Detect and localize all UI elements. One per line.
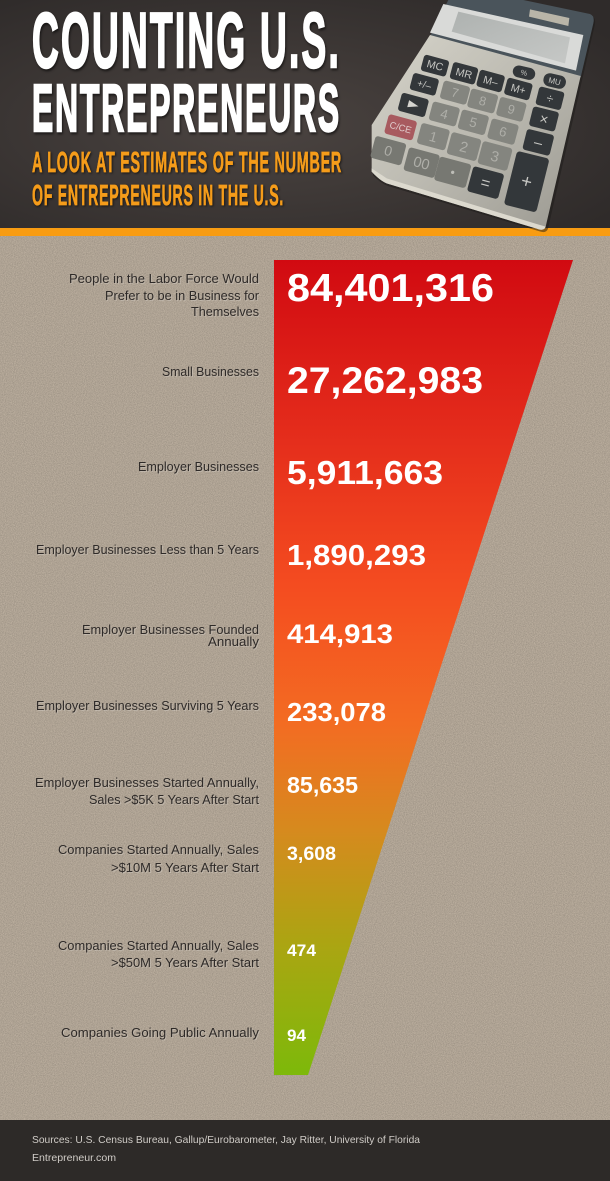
row: 474: Companies Started Annually, Sales: [58, 939, 259, 953]
calculator keys: M+: [509, 82, 527, 97]
row: 85,635: 85,635: [287, 772, 358, 798]
title: [32, 0, 341, 146]
row: 414,913: [82, 619, 393, 649]
footer credit: Entrepreneur.com: [32, 1152, 116, 1164]
calculator keys: 5: [468, 114, 479, 131]
calculator keys: ÷: [545, 91, 555, 106]
row: 85,635: Sales >$5K 5 Years After Start: [89, 793, 259, 807]
row: 474: 474: [287, 941, 317, 960]
calculator keys: MC: [425, 58, 445, 74]
row: 27,262,983: [162, 360, 483, 401]
calculator keys: ×: [538, 111, 550, 129]
row: 233,078: Employer Businesses Surviving 5 Years: [36, 699, 259, 713]
header panel: [0, 0, 610, 228]
calculator keys: MR: [454, 66, 474, 82]
header background: [0, 0, 610, 228]
icon: calculator: [370, 0, 595, 232]
row: 94: [61, 1026, 307, 1045]
row: 1,890,293: 1,890,293: [287, 540, 426, 572]
calculator keys: [370, 54, 567, 213]
row: 5,911,663: 5,911,663: [287, 454, 443, 491]
row: 233,078: [36, 697, 386, 727]
calculator keys: MU: [547, 76, 562, 87]
row: 84,401,316: [69, 267, 494, 319]
row: 3,608: [58, 843, 336, 875]
calculator keys: M–: [482, 74, 499, 89]
orange divider bar: [0, 228, 610, 236]
row: 414,913: Annually: [208, 635, 260, 649]
row: 94: Companies Going Public Annually: [61, 1026, 260, 1040]
row: 474: >$50M 5 Years After Start: [111, 956, 260, 970]
subtitle: [32, 147, 342, 212]
row: 84,401,316: 84,401,316: [287, 267, 494, 310]
row: 27,262,983: 27,262,983: [287, 360, 483, 401]
row: 84,401,316: People in the Labor Force Would: [69, 272, 259, 286]
row: 84,401,316: Themselves: [191, 305, 259, 319]
calculator keys: 9: [506, 102, 516, 117]
row: 5,911,663: Employer Businesses: [138, 460, 259, 474]
calculator keys: 6: [497, 124, 508, 140]
calculator keys: =: [479, 174, 492, 193]
calculator keys: 8: [477, 94, 488, 109]
row: 27,262,983: Small Businesses: [162, 365, 259, 379]
row: 5,911,663: [138, 454, 443, 491]
row: 414,913: Employer Businesses Founded: [82, 623, 259, 637]
calculator keys: +/–: [416, 78, 433, 93]
row: 85,635: Employer Businesses Started Annually,: [35, 776, 259, 790]
calculator keys: +: [519, 170, 535, 193]
calculator keys: 0: [383, 142, 394, 159]
funnel chart: [35, 260, 573, 1075]
row: 94: 94: [287, 1026, 307, 1045]
row: 3,608: 3,608: [287, 844, 336, 865]
calculator keys: C/CE: [389, 120, 413, 135]
row: 84,401,316: Prefer to be in Business for: [105, 289, 259, 303]
calculator keys: 1: [428, 128, 439, 145]
sand textured background: [0, 236, 610, 1120]
subtitle: OF ENTREPRENEURS IN THE U.S.: [32, 180, 284, 212]
row: 474: [58, 939, 317, 970]
calculator keys: 00: [411, 154, 431, 174]
row: 3,608: >$10M 5 Years After Start: [111, 861, 260, 875]
row: 85,635: [35, 772, 358, 807]
calculator keys: 4: [439, 106, 450, 123]
funnel shape: [274, 260, 573, 1075]
row: 414,913: 414,913: [287, 619, 393, 649]
calculator keys: 2: [458, 139, 470, 157]
row: 1,890,293: [36, 540, 426, 572]
row: 3,608: Companies Started Annually, Sales: [58, 843, 259, 857]
sources text: Sources: U.S. Census Bureau, Gallup/Eurobarometer, Jay Ritter, University of Florida: [32, 1134, 420, 1146]
calculator keys: %: [520, 68, 529, 78]
calculator keys: –: [532, 135, 545, 152]
row: 1,890,293: Employer Businesses Less than 5 Years: [36, 543, 259, 557]
calculator keys: 7: [450, 85, 460, 101]
row: 233,078: 233,078: [287, 697, 386, 727]
calculator keys: 3: [489, 149, 501, 166]
footer panel: [0, 1120, 610, 1181]
